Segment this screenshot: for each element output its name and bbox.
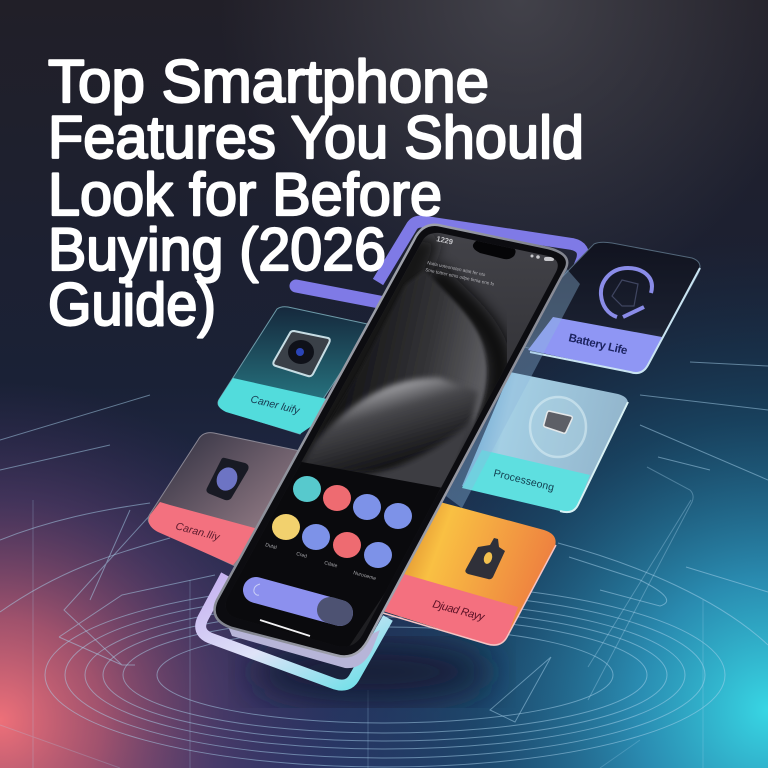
phone metallic base edge	[222, 612, 380, 668]
app labels	[264, 542, 377, 582]
background wireframe circles and lines	[0, 362, 768, 768]
panel: processing card	[462, 372, 628, 512]
purple frame behind phone	[296, 222, 583, 304]
label: battery life: Battery Life	[567, 332, 628, 357]
panel: camera quality card	[218, 307, 372, 434]
notification text: Nutia uoteonoten atiat fer nto	[427, 260, 486, 277]
app labels: Cred	[295, 551, 308, 560]
title: Look for Before	[48, 161, 442, 228]
icon: mini phone	[206, 458, 249, 500]
lower frame behind phone	[201, 575, 388, 685]
app labels: Cdate	[323, 560, 338, 569]
title	[48, 48, 584, 338]
search bar	[254, 584, 340, 613]
phone screen	[243, 232, 558, 646]
icon: camera module	[273, 331, 330, 376]
panel: durability card	[383, 502, 556, 645]
app labels: Nurooeme	[352, 570, 377, 582]
panel: battery life card	[520, 242, 700, 373]
icon: dark bottle badge	[465, 538, 505, 579]
camera cutout	[473, 240, 516, 259]
home indicator	[260, 620, 310, 636]
notification text: Sme tottrer etnis odpe tirnia ene fo	[425, 267, 495, 287]
panel: connectivity card	[148, 433, 305, 566]
app labels: Dutal	[264, 542, 277, 551]
title: Top Smartphone	[48, 48, 489, 115]
icon: glass processor chip	[530, 397, 586, 457]
icon: battery ring	[601, 268, 652, 317]
phone bezel	[215, 225, 567, 656]
phone glass side panel	[446, 268, 580, 508]
label: processing: Processeong	[492, 467, 555, 494]
label: connectivity: Caran.lliy	[174, 520, 222, 544]
label: camera quality: Caner luify	[249, 393, 301, 417]
phone drop shadow	[252, 642, 492, 702]
status time: 1229	[436, 234, 454, 246]
smartphone	[200, 220, 580, 670]
status icons	[530, 254, 554, 261]
title: Features You Should	[48, 104, 584, 171]
title: Buying (2026	[48, 216, 386, 283]
label: durability: Djuad Rayy	[431, 598, 487, 624]
title: Guide)	[48, 271, 216, 338]
app icons	[272, 476, 412, 568]
